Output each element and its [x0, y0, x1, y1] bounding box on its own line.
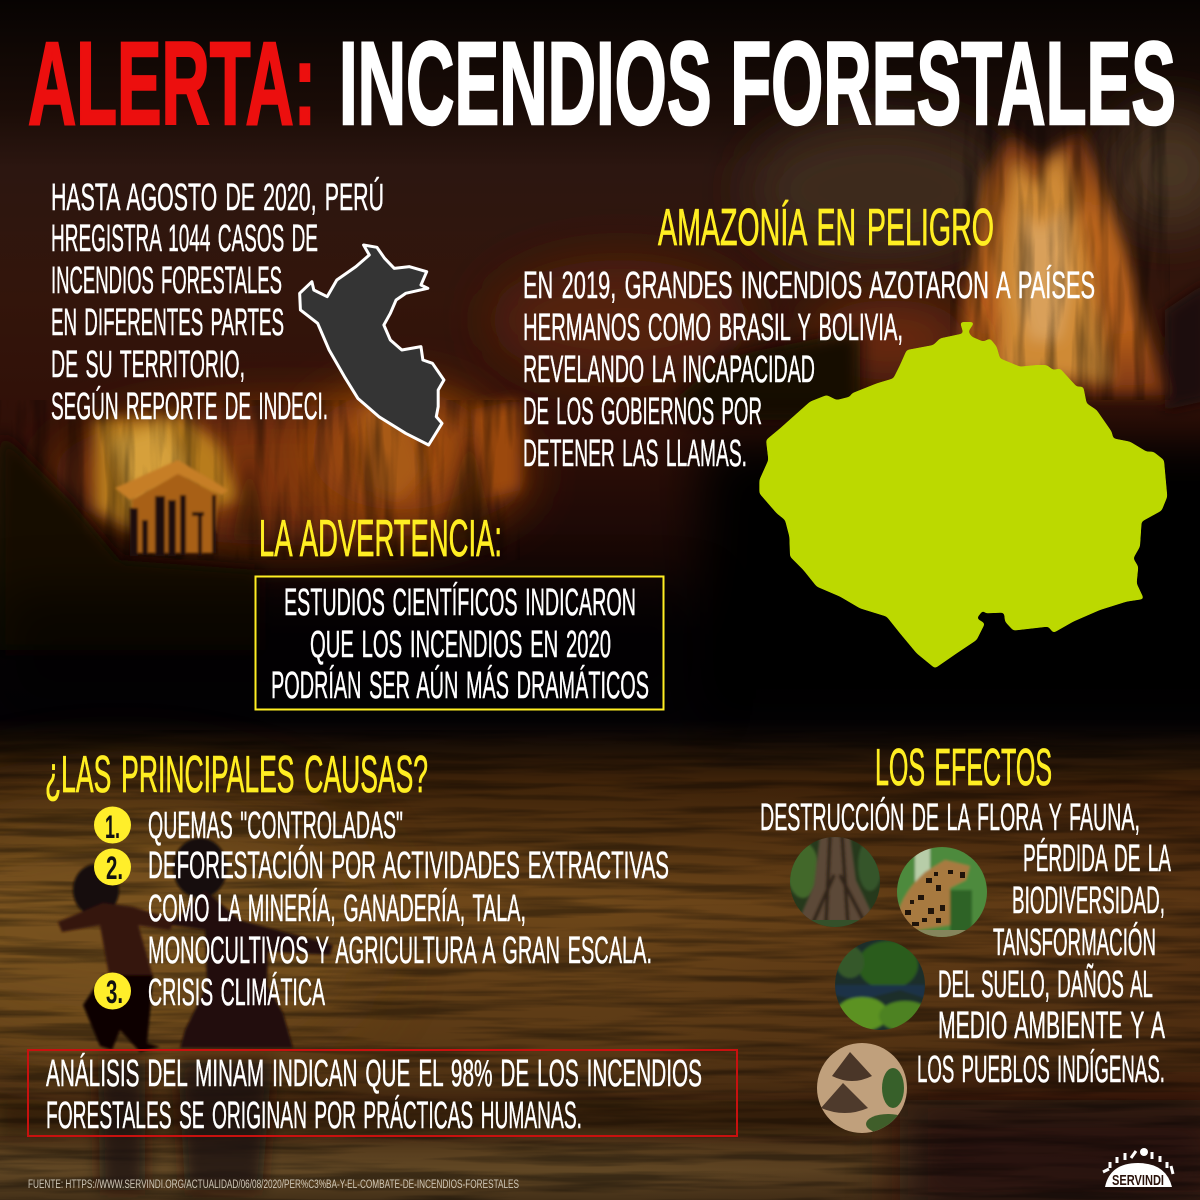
text block: Amazonia description: DE LOS GOBIERNOS POR [523, 391, 762, 433]
title word: alerta: ALERTA: [28, 18, 316, 150]
water tint [0, 800, 360, 1060]
text block: effects [760, 796, 1171, 1091]
text block: Peru cases: DE SU TERRITORIO, [51, 344, 245, 386]
burning house [115, 460, 228, 556]
mid ember glow [810, 300, 970, 380]
source note: FUENTE: HTTPS://WWW.SERVINDI.ORG/ACTUALIDAD/06/08/2020/PER%C3%BA-Y-EL-COMBATE-DE-INCENDIOS-FORESTALES [28, 1179, 519, 1191]
smoke [750, 120, 1010, 260]
logo: Servindi: SERVINDI [1112, 1172, 1164, 1189]
text block: Peru cases: HASTA AGOSTO DE 2020, PERÚ [51, 176, 384, 219]
callout: warning box: ESTUDIOS CIENTÍFICOS INDICARON [284, 581, 636, 624]
logo: Servindi [1103, 1148, 1173, 1189]
number badge 3 [94, 972, 131, 1010]
text block: Peru cases: SEGÚN REPORTE DE INDECI. [51, 385, 328, 428]
number badge 2 [94, 848, 131, 886]
number badge 3: 3. [106, 974, 123, 1010]
photo circle: jaguar [897, 847, 987, 937]
dark left foreground [0, 430, 260, 650]
callout: warning box: QUE LOS INCENDIOS EN 2020 [310, 624, 611, 666]
cause 3 text: CRISIS CLIMÁTICA [148, 971, 325, 1014]
number badge 1 [94, 806, 131, 845]
number badge 1: 1. [105, 809, 120, 845]
text block: Amazonia description: DETENER LAS LLAMAS. [523, 433, 747, 475]
text block: Peru cases [51, 176, 384, 428]
cause 2 text: MONOCULTIVOS Y AGRICULTURA A GRAN ESCALA. [148, 930, 652, 972]
text block: Peru cases: HREGISTRA 1044 CASOS DE [51, 218, 318, 260]
callout: warning box [256, 576, 664, 710]
photo circle: forest from above [835, 940, 925, 1030]
cause 1 text: QUEMAS "CONTROLADAS" [148, 805, 403, 847]
dark trees [232, 430, 495, 540]
right dark zone [700, 440, 1200, 720]
text block: Amazonia description: REVELANDO LA INCAPACIDAD [523, 349, 815, 391]
callout: MINAM analysis [28, 1050, 737, 1137]
text block: Amazonia description [523, 264, 1095, 475]
left flames [50, 405, 530, 545]
map of the Amazon basin [759, 322, 1167, 668]
heading: la advertencia: LA ADVERTENCIA: [259, 510, 502, 568]
heading: principales causas: ¿LAS PRINCIPALES CAUSAS? [45, 746, 428, 804]
cause 2 text: COMO LA MINERÍA, GANADERÍA, TALA, [148, 887, 526, 930]
cause 2 text: DEFORESTACIÓN POR ACTIVIDADES EXTRACTIVAS [148, 844, 669, 887]
icon: map of Peru [300, 245, 444, 445]
children running silhouettes [58, 838, 333, 1190]
right flame [955, 130, 1200, 410]
cause 2 text [148, 844, 669, 972]
text block: Peru cases: INCENDIOS FORESTALES [51, 260, 282, 302]
title [28, 18, 1176, 150]
text block: Peru cases: EN DIFERENTES PARTES [51, 302, 284, 344]
photo circle: rainforest tree [790, 837, 880, 927]
photo circle: indigenous huts [817, 1043, 907, 1133]
callout: warning box: PODRÍAN SER AÚN MÁS DRAMÁTICOS [271, 664, 649, 707]
callout: MINAM analysis: FORESTALES SE ORIGINAN POR PRÁCTICAS HUMANAS. [46, 1094, 582, 1137]
list: causes [94, 805, 669, 1014]
number badge 2: 2. [106, 850, 123, 886]
